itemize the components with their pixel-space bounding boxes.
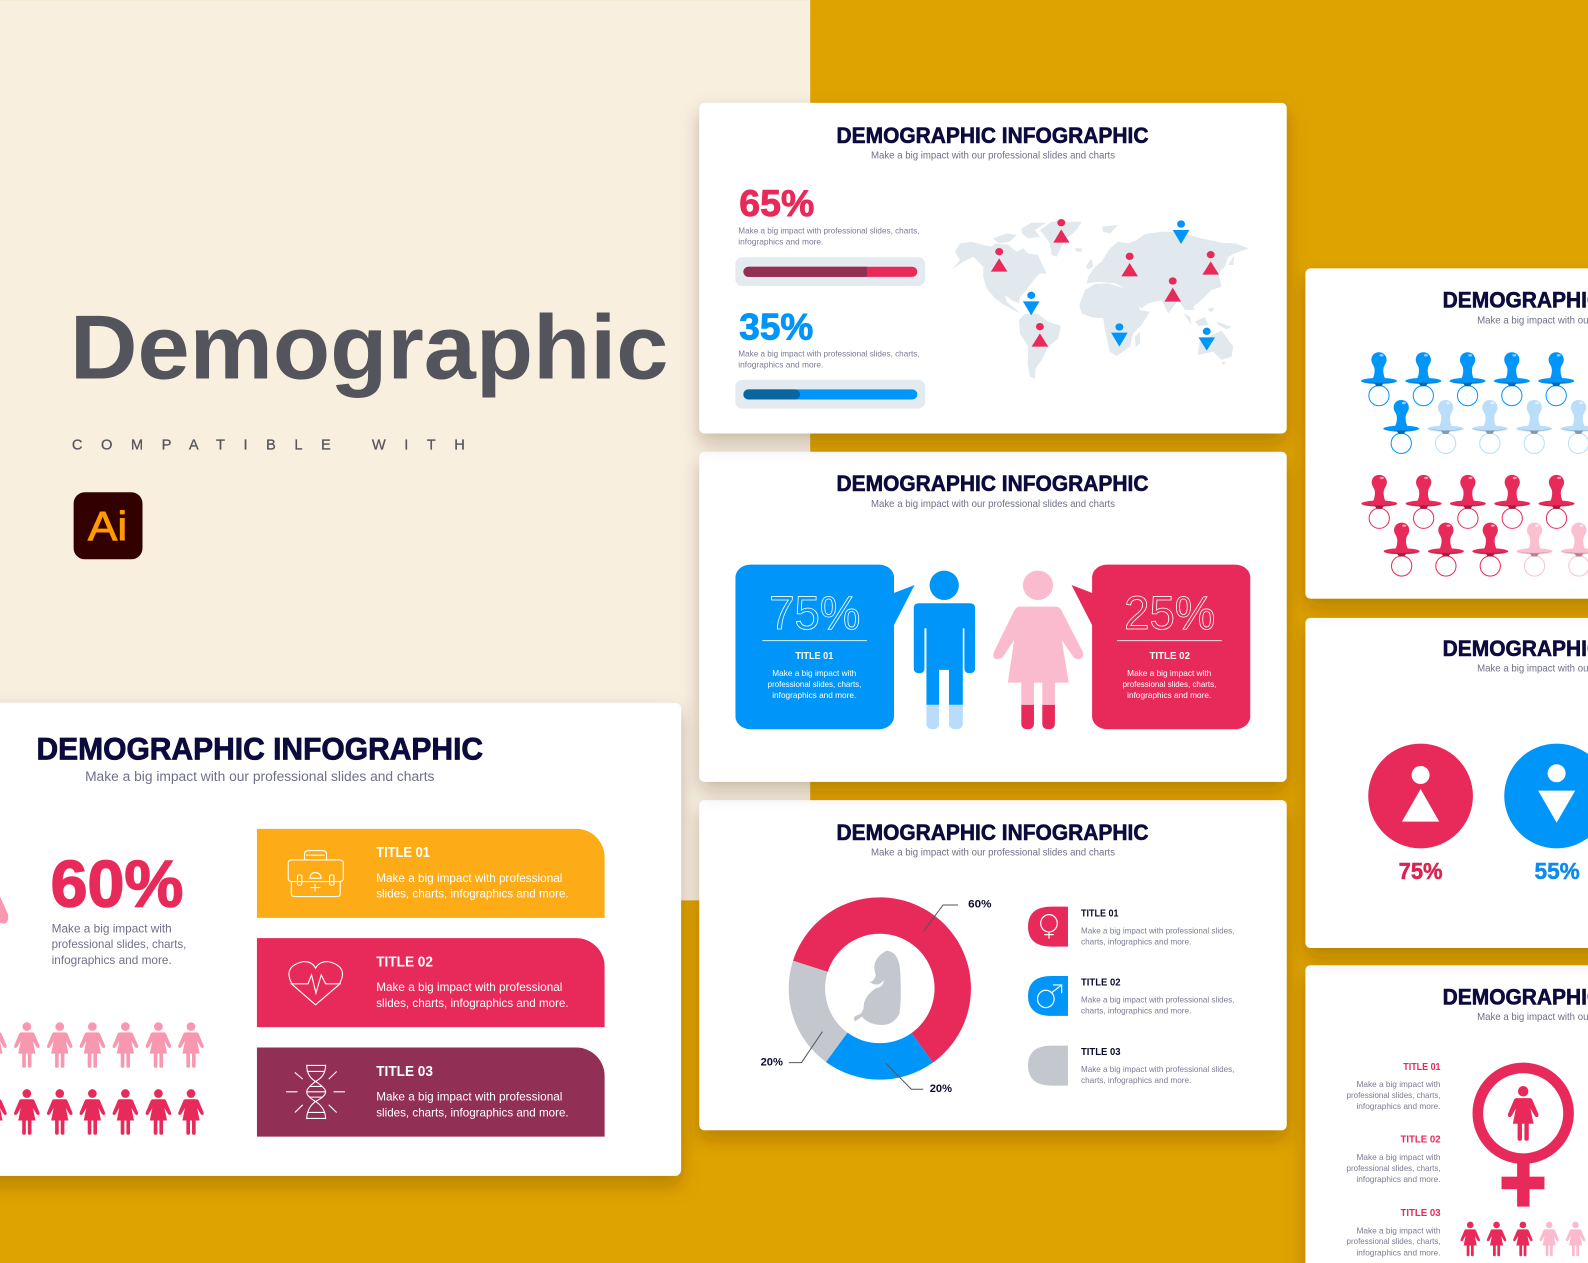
text block 3: professional slides, charts, (1347, 1237, 1441, 1246)
world map (952, 222, 1249, 378)
text block 2: TITLE 02 (1401, 1135, 1441, 1146)
stat: 35%: 35% (739, 305, 813, 347)
banner 2: red (257, 938, 605, 1027)
banner 1: yellow: slides, charts, infographics and more. (376, 887, 569, 901)
donut leader lines and values (761, 898, 992, 1095)
heading: DEMOGRAPHIC INFOGRAPHIC (837, 820, 1149, 845)
donut leader lines and values: 60% (968, 898, 992, 910)
icon: female symbol with figure (1478, 1068, 1569, 1207)
pacifiers: red (1361, 475, 1588, 576)
text block 3: infographics and more. (1356, 1248, 1441, 1257)
icon: male circle (1504, 744, 1588, 848)
banner 1: yellow: TITLE 01 (376, 845, 430, 861)
legend icon: male (1028, 976, 1068, 1016)
description: Make a big impact with (52, 922, 172, 936)
legend text 1: charts, infographics and more. (1081, 937, 1191, 946)
legend text 1 (1081, 908, 1234, 946)
stat: 60%: 60% (51, 846, 183, 920)
callout: blue 75%: 75% (769, 587, 860, 640)
stat: 55%: 55% (1535, 858, 1580, 884)
callout: blue 75%: TITLE 01 (795, 651, 834, 662)
description 65% (738, 226, 920, 246)
legend text 2: Make a big impact with professional slides, (1081, 996, 1234, 1005)
panel: pacifier slide (1305, 268, 1588, 599)
banner 3: plum: Make a big impact with professional (376, 1090, 562, 1104)
banner 2: red: TITLE 02 (376, 955, 433, 971)
pacifiers: blue (1361, 352, 1588, 453)
legend text 3: charts, infographics and more. (1081, 1076, 1191, 1085)
heading: DEMOGRAPHIC INFOGRAPHIC (837, 123, 1149, 148)
panel: 60% slide (left) (0, 703, 681, 1176)
description 35%: Make a big impact with professional slides, charts, (738, 349, 920, 358)
description (52, 922, 186, 967)
description: professional slides, charts, (52, 937, 186, 951)
icon: male figure (914, 571, 975, 729)
legend icon: grey (1028, 1046, 1068, 1086)
donut leader lines and values: 20% (930, 1083, 952, 1095)
legend text 2: TITLE 02 (1081, 977, 1121, 988)
banner 2: red: Make a big impact with professional (376, 980, 562, 994)
banner 2: red: slides, charts, infographics and more. (376, 996, 569, 1010)
callout: blue 75%: Make a big impact with (772, 669, 856, 678)
subtitle: Make a big impact with our professional slides and charts (871, 499, 1115, 510)
text block 2 (1347, 1135, 1441, 1184)
text block 1: infographics and more. (1356, 1102, 1441, 1111)
background: cream panel (0, 0, 810, 900)
banner 3: plum: slides, charts, infographics and more. (376, 1105, 569, 1119)
icon: partial figure arm (0, 896, 8, 924)
subtitle: Make a big impact with our professional slides and charts (871, 150, 1115, 161)
icon: Adobe Illustrator logo: Ai (88, 503, 127, 549)
panel: percent circles slide (1305, 618, 1588, 948)
banner 3: plum (257, 1048, 605, 1137)
progress bar 35% (735, 380, 925, 409)
callout: red 25%: Make a big impact with (1127, 669, 1211, 678)
text block 2: infographics and more. (1356, 1175, 1441, 1184)
heading: DEMOGRAPHIC INFOGRAPHIC (837, 471, 1149, 496)
callout: blue 75% (735, 565, 915, 729)
banner 1: yellow (257, 829, 605, 918)
text block 3 (1347, 1208, 1441, 1257)
text block 3: Make a big impact with (1356, 1226, 1441, 1235)
stat: 75%: 75% (1399, 858, 1443, 884)
legend text 2: charts, infographics and more. (1081, 1007, 1191, 1016)
legend text 1: Make a big impact with professional slides, (1081, 926, 1234, 935)
icon: female figure (993, 571, 1083, 729)
subtitle: Make a big impact with our professional slides and charts (871, 848, 1115, 859)
description 65%: Make a big impact with professional slides, charts, (738, 226, 920, 235)
icon: medical briefcase (288, 851, 343, 897)
legend text 3: Make a big impact with professional slides, (1081, 1065, 1234, 1074)
callout: red 25%: TITLE 02 (1149, 651, 1190, 662)
panel: donut chart slide (699, 800, 1287, 1130)
panel: female symbol slide (1305, 965, 1588, 1263)
description 35%: infographics and more. (738, 360, 823, 369)
text block 1: TITLE 01 (1403, 1062, 1441, 1073)
text block 3: TITLE 03 (1401, 1208, 1441, 1219)
text block 1: professional slides, charts, (1347, 1091, 1441, 1100)
banner 1: yellow: Make a big impact with professional (376, 871, 562, 885)
legend text 1: TITLE 01 (1081, 908, 1119, 919)
legend icon: female (1028, 907, 1068, 947)
callout: red 25%: 25% (1124, 587, 1215, 640)
subheading: compatible with: COMPATIBLE WITH (72, 437, 465, 453)
legend text 2 (1081, 977, 1234, 1016)
text block 1: Make a big impact with (1356, 1080, 1441, 1089)
donut chart (789, 897, 971, 1080)
panel: male and female figures slide (699, 452, 1287, 782)
text block 2: Make a big impact with (1356, 1153, 1441, 1162)
people row (1461, 1222, 1585, 1256)
legend text 3 (1081, 1047, 1234, 1085)
donut leader lines and values: 20% (761, 1056, 783, 1068)
legend text 3: TITLE 03 (1081, 1047, 1121, 1058)
icon: Adobe Illustrator logo (74, 492, 142, 559)
panel: world map slide (699, 103, 1287, 434)
icon: heart with pulse (289, 962, 342, 1005)
subtitle: Make a big impact with our professional slides and charts (85, 769, 434, 785)
map pins (991, 219, 1219, 351)
callout: blue 75%: infographics and more. (772, 691, 856, 700)
progress bar 65% (735, 257, 925, 286)
banner 3: plum: TITLE 03 (376, 1064, 433, 1080)
main heading: Demographic: Demographic (70, 296, 668, 398)
description: infographics and more. (52, 953, 172, 967)
callout: blue 75%: professional slides, charts, (768, 680, 861, 689)
description 65%: infographics and more. (738, 237, 823, 246)
people row: light (0, 1022, 204, 1068)
heading: DEMOGRAPHIC INFOGRAPHIC (36, 731, 483, 766)
callout: red 25%: infographics and more. (1127, 691, 1211, 700)
callout: red 25% (1072, 565, 1250, 729)
callout: red 25%: professional slides, charts, (1123, 680, 1216, 689)
people row: dark (0, 1089, 204, 1135)
icon: embryo (854, 951, 901, 1025)
icon: DNA helix (286, 1065, 345, 1119)
text block 2: professional slides, charts, (1347, 1164, 1441, 1173)
stat: 65%: 65% (739, 182, 814, 224)
icon: female circle (1368, 744, 1473, 848)
description 35% (738, 349, 920, 369)
text block 1 (1347, 1062, 1441, 1111)
